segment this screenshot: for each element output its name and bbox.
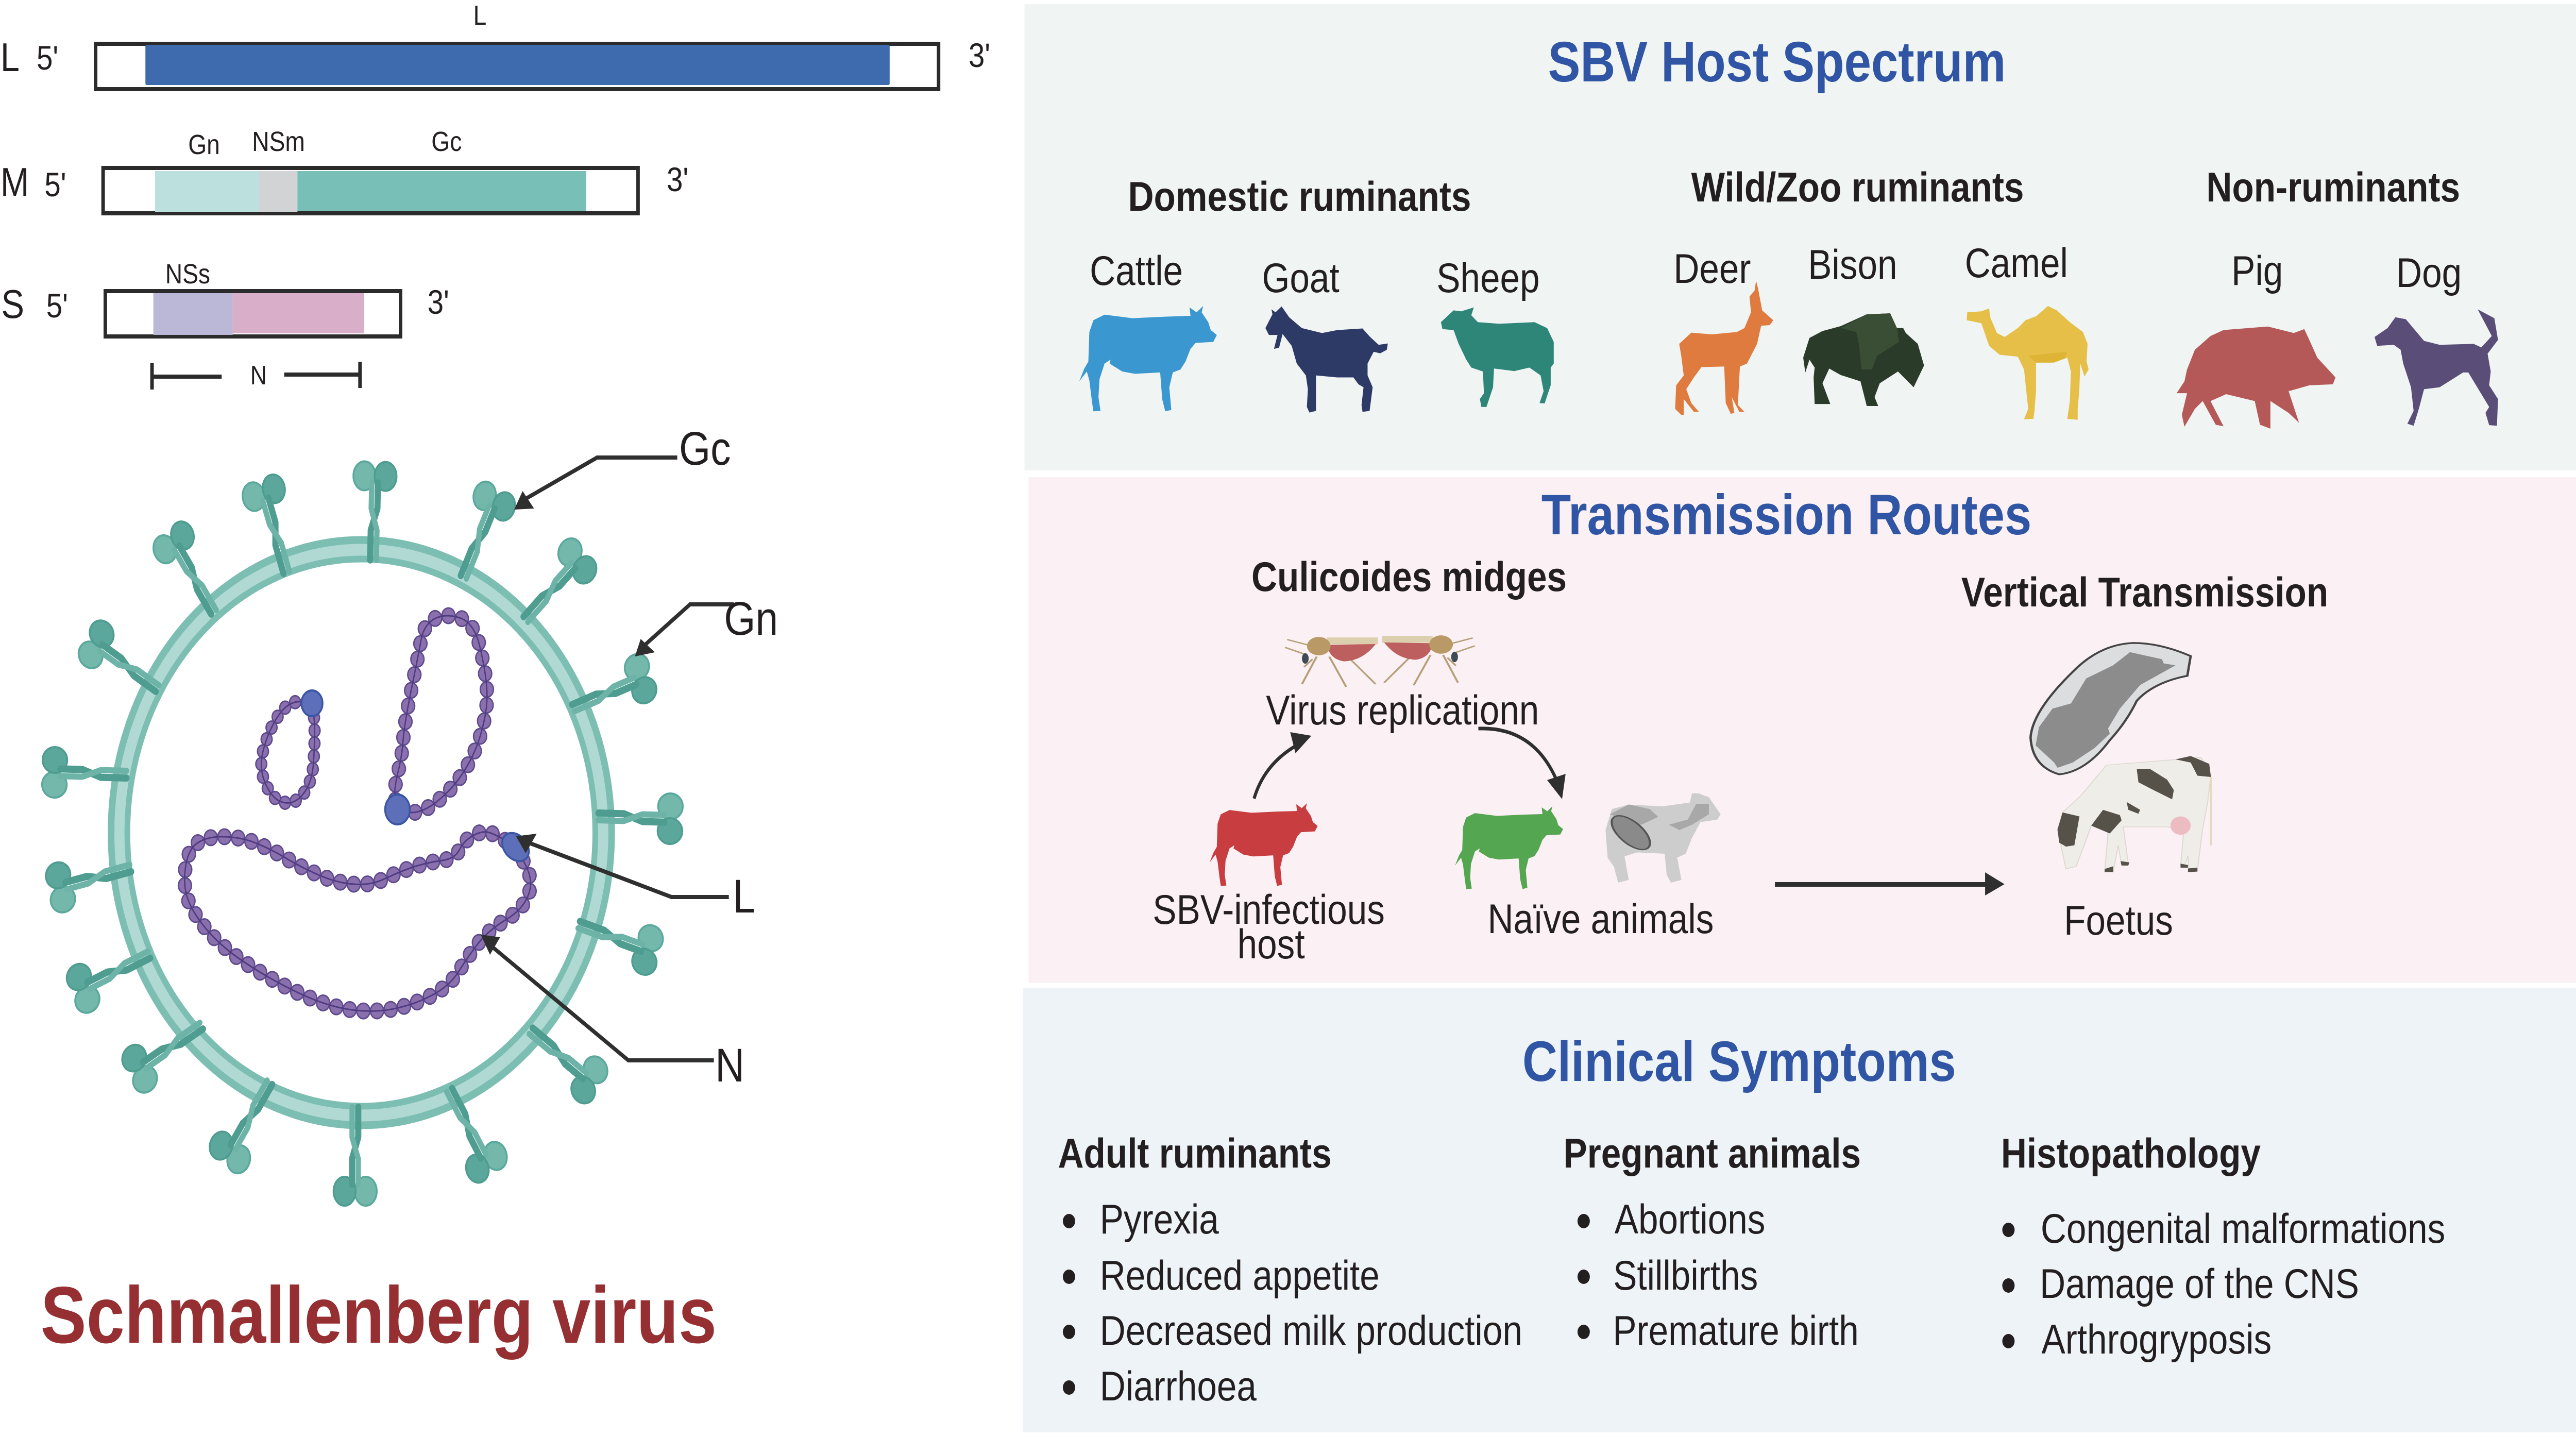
- column: adult ruminants: [1058, 1130, 1522, 1409]
- animal: dog: [2375, 249, 2498, 426]
- animal: bison: Bison: [1808, 241, 1897, 288]
- animal: camel: [1965, 240, 2089, 420]
- subheading: Culicoides midges: Culicoides midges: [1251, 553, 1567, 600]
- subheading: Wild/Zoo ruminants: Wild/Zoo ruminants: [1691, 164, 2024, 210]
- text: Virus replicationn: Virus replicationn: [1266, 687, 1539, 733]
- medium RNA ribonucleoprotein: [385, 616, 487, 824]
- glycoprotein spikes: [42, 461, 683, 1206]
- L segment: 3': [969, 37, 990, 75]
- panel: transmission routes: [1028, 477, 2576, 983]
- column: adult ruminants: Diarrhoea: [1100, 1363, 1257, 1409]
- animal: cattle: Cattle: [1090, 247, 1183, 294]
- callout: N: [481, 935, 744, 1092]
- S segment: [2, 259, 449, 336]
- heading: Transmission Routes: Transmission Routes: [1541, 483, 2031, 547]
- callout: Gn: Gn: [724, 593, 778, 645]
- column: histopathology: [2001, 1130, 2445, 1362]
- M segment: 5': [44, 166, 66, 204]
- animal: goat: Goat: [1262, 255, 1340, 301]
- text: Foetus: Foetus: [2064, 897, 2173, 943]
- icon: green naive cow: [1455, 806, 1563, 889]
- column: pregnant animals: Premature birth: [1613, 1307, 1859, 1354]
- animal: deer: Deer: [1673, 245, 1751, 292]
- callout: Gc: [514, 422, 731, 510]
- column: pregnant animals: Abortions: [1615, 1196, 1765, 1242]
- text: SBV-infectious host: [1153, 886, 1385, 967]
- M segment: Gc: [431, 126, 462, 157]
- column: adult ruminants: Pyrexia: [1100, 1196, 1219, 1242]
- heading: Clinical Symptoms: Clinical Symptoms: [1522, 1029, 1956, 1093]
- text: Naive animals: Naïve animals: [1487, 895, 1714, 942]
- title: Schmallenberg virus: [41, 1270, 717, 1360]
- arrow: midges to naive animals: [1478, 729, 1566, 799]
- S segment: NSs: [165, 259, 210, 290]
- M segment: Gn: [188, 129, 220, 160]
- M segment: 3': [667, 161, 688, 199]
- callout: Gc: Gc: [679, 422, 731, 475]
- column: pregnant animals: Stillbirths: [1613, 1252, 1758, 1298]
- panel: genome segments: [1, 0, 990, 391]
- callout: N: N: [715, 1039, 744, 1092]
- viral envelope: [111, 540, 612, 1125]
- column: histopathology: Arthrogryposis: [2042, 1316, 2272, 1362]
- column: pregnant animals: Pregnant animals: [1564, 1130, 1861, 1176]
- large RNA ribonucleoprotein: [184, 827, 534, 1011]
- column: histopathology: Congenital malformations: [2041, 1205, 2445, 1252]
- callout: L: [516, 834, 755, 923]
- L segment: L: [473, 0, 486, 31]
- S segment: 5': [46, 287, 68, 325]
- arrow: host to midges: [1254, 732, 1311, 799]
- small RNA ribonucleoprotein: [261, 690, 323, 803]
- animal: goat: [1262, 255, 1388, 413]
- heading: SBV Host Spectrum: SBV Host Spectrum: [1548, 30, 2006, 94]
- subheading: Vertical Transmission: Vertical Transmission: [1961, 569, 2328, 615]
- animal: camel: Camel: [1965, 240, 2068, 286]
- animal: pig: [2177, 247, 2335, 429]
- animal: cattle: [1079, 247, 1217, 411]
- callout: L: L: [733, 870, 755, 923]
- animal: dog: Dog: [2396, 249, 2462, 296]
- S segment: 3': [428, 283, 449, 322]
- column: adult ruminants: Adult ruminants: [1058, 1130, 1332, 1176]
- animal: pig: Pig: [2231, 247, 2283, 294]
- icon: red SBV-infectious cow: [1210, 803, 1318, 886]
- animal: sheep: [1436, 255, 1554, 407]
- icon: midges: [1285, 635, 1475, 687]
- icon: foetus in uterus: [2030, 643, 2191, 774]
- text: SBV-infectious host: SBV-infectious: [1153, 886, 1385, 933]
- animal: bison: [1803, 241, 1924, 406]
- icon: Holstein cow: [2058, 756, 2211, 872]
- subheading: Non-ruminants: Non-ruminants: [2206, 164, 2460, 210]
- arrow: to vertical transmission: [1775, 872, 2005, 895]
- subheading: Domestic ruminants: Domestic ruminants: [1128, 173, 1471, 219]
- M segment: [1, 126, 688, 213]
- column: adult ruminants: Decreased milk production: [1100, 1307, 1522, 1354]
- animal: sheep: Sheep: [1436, 255, 1540, 301]
- virus particle diagram: [42, 422, 778, 1206]
- column: adult ruminants: Reduced appetite: [1100, 1252, 1380, 1298]
- text: SBV-infectious host: host: [1238, 921, 1305, 967]
- icon: grey pregnant cow: [1604, 793, 1721, 883]
- N bracket: [152, 361, 360, 391]
- L segment: L: [1, 35, 20, 80]
- S segment: S: [2, 282, 24, 327]
- L segment: 5': [37, 39, 58, 77]
- M segment: NSm: [252, 126, 305, 157]
- column: histopathology: Histopathology: [2001, 1130, 2261, 1176]
- animal: deer: [1673, 245, 1773, 415]
- panel: SBV host spectrum: [1025, 4, 2576, 470]
- callout: Gn: [635, 593, 778, 656]
- panel: clinical symptoms: [1023, 988, 2576, 1432]
- column: histopathology: Damage of the CNS: [2040, 1260, 2359, 1307]
- L segment: [1, 0, 990, 89]
- column: pregnant animals: [1564, 1130, 1861, 1354]
- N bracket: N: [250, 361, 267, 391]
- M segment: M: [1, 160, 29, 205]
